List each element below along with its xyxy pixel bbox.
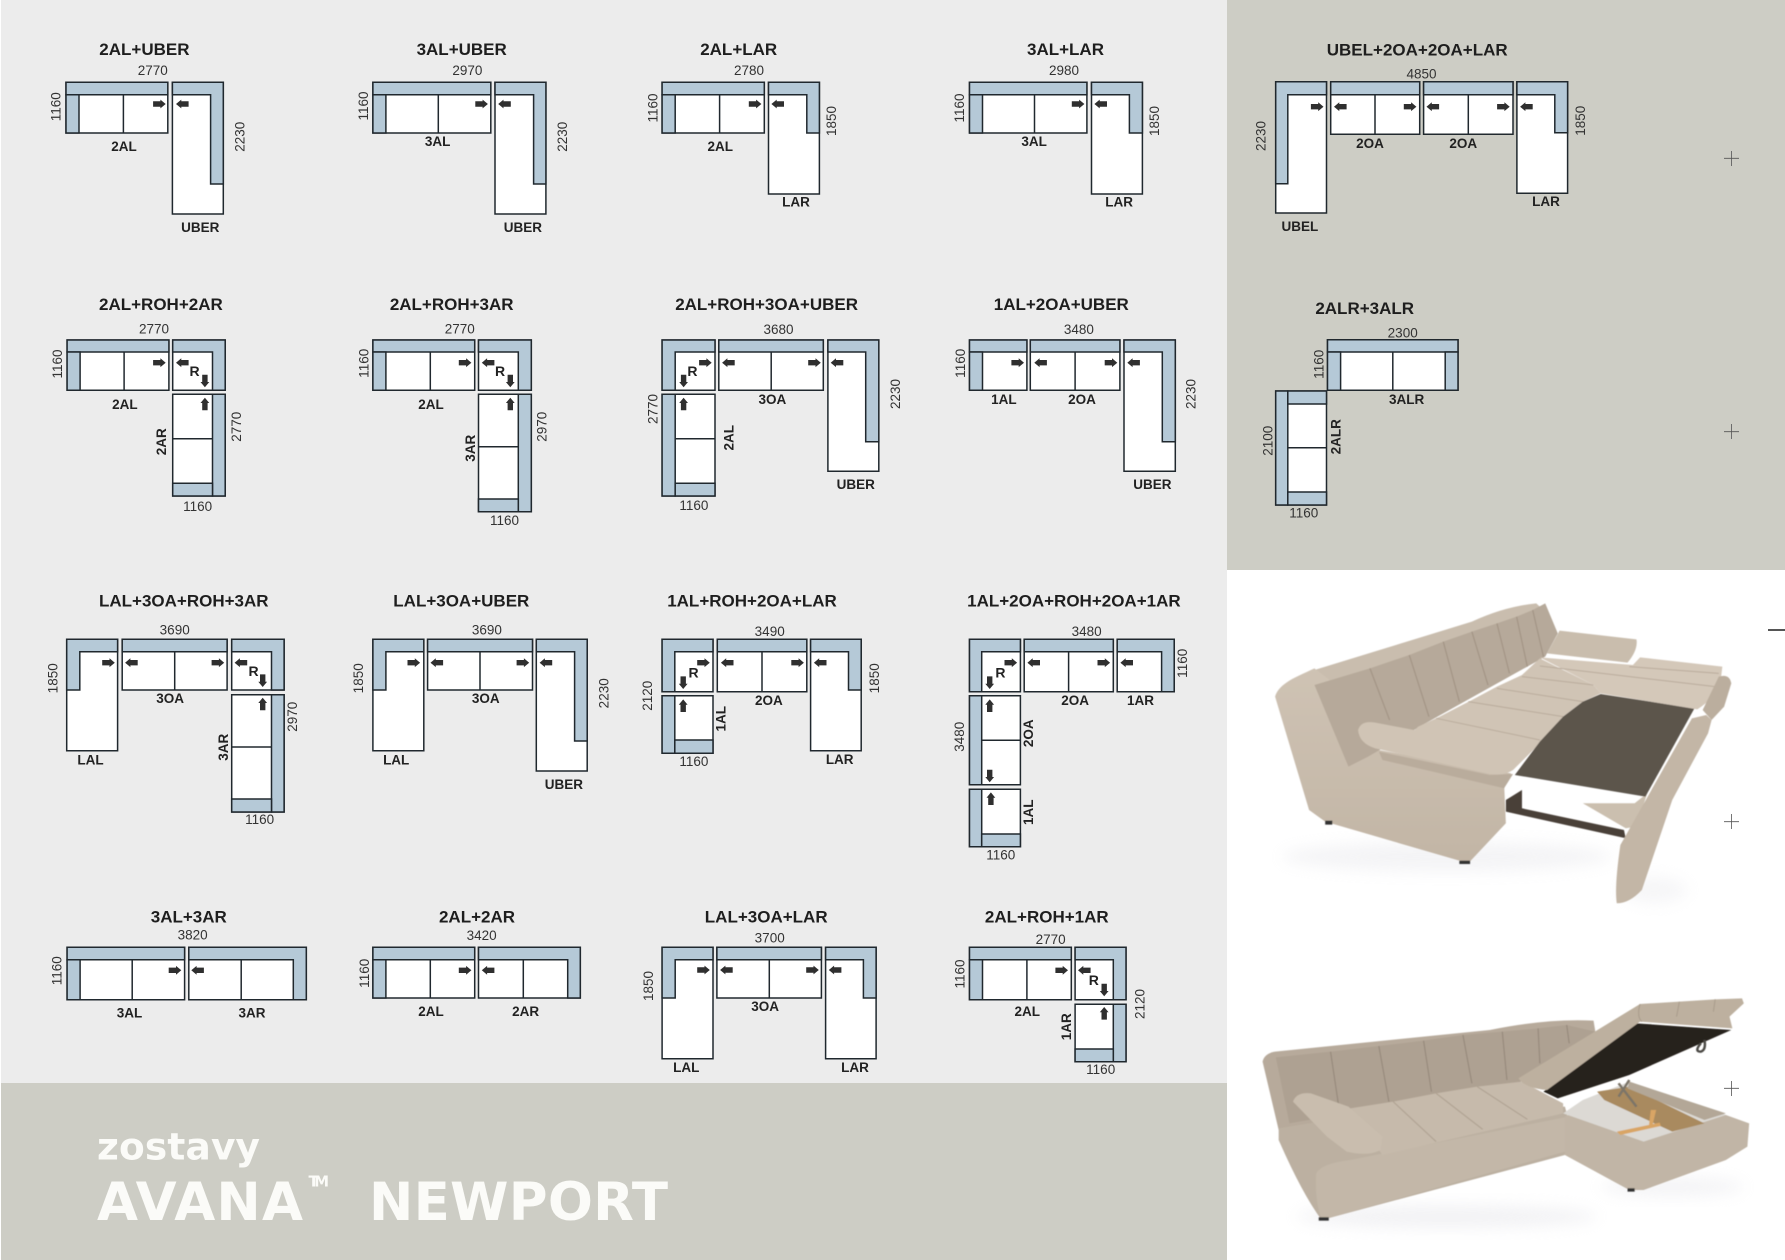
background: footer band — [1, 1083, 1227, 1260]
heading: 1AL+2OA+ROH+2OA+1AR — [967, 592, 1181, 611]
length dimension left: 3480 — [952, 722, 967, 752]
module 2AL vertical — [662, 394, 715, 496]
model name: NEWPORT — [369, 1172, 668, 1233]
label 3AL: 3AL — [1021, 134, 1047, 149]
width dimension: 3680 — [763, 322, 794, 337]
width dimension: 2770 — [139, 321, 169, 336]
depth dimension bottom: 1160 — [245, 812, 274, 827]
module LAR — [1092, 82, 1142, 194]
registration mark: sofa one — [1724, 814, 1739, 829]
length dimension left: 2120 — [640, 681, 655, 711]
length dimension: 1850 — [641, 971, 656, 1001]
module ROH corner: R — [688, 664, 699, 680]
label LAR: LAR — [841, 1060, 869, 1075]
width dimension: 3700 — [755, 930, 785, 945]
label 3AL: 3AL — [117, 1005, 142, 1020]
module 2AR — [478, 947, 580, 998]
heading: 1AL+2OA+UBER — [994, 295, 1129, 314]
edge dash mark — [1768, 629, 1785, 631]
module 2OA — [717, 639, 807, 692]
label 3OA: 3OA — [472, 691, 500, 706]
photo: sofa with open storage — [1263, 998, 1749, 1228]
label 2AL: 2AL — [708, 139, 733, 154]
label LAR: LAR — [826, 752, 854, 767]
label 2AL: 2AL — [111, 139, 137, 154]
label 2AL: 2AL — [418, 397, 444, 412]
module ROH corner: R — [248, 663, 259, 679]
label 2OA: 2OA — [1061, 693, 1089, 708]
module 3OA — [428, 639, 532, 690]
label 3AR: 3AR — [238, 1005, 266, 1020]
depth dimension bottom: 1160 — [183, 499, 212, 514]
depth dimension: 1160 — [646, 93, 661, 123]
diagram: 3AL+UBER — [356, 40, 570, 235]
heading: 2AL+2AR — [439, 908, 515, 927]
heading: LAL+3OA+LAR — [705, 908, 828, 927]
label 3AR: 3AR — [463, 435, 478, 462]
width dimension: 2770 — [1036, 932, 1066, 947]
heading: 2AL+ROH+3OA+UBER — [675, 295, 858, 314]
module 2AL — [67, 340, 169, 390]
heading: 2AL+ROH+2AR — [99, 295, 223, 314]
depth dimension: 1160 — [357, 959, 372, 988]
depth dimension: 1160 — [49, 92, 64, 121]
module UBER — [1124, 340, 1175, 471]
width dimension: 2770 — [445, 321, 475, 336]
depth dimension bottom: 1160 — [679, 498, 708, 513]
depth dimension bottom: 1160 — [1289, 506, 1318, 521]
module 3AL — [970, 82, 1087, 133]
module LAR — [1517, 82, 1568, 193]
diagram: 2ALR+3ALR — [1261, 299, 1458, 521]
width dimension: 3420 — [467, 928, 497, 943]
heading: 1AL+ROH+2OA+LAR — [667, 592, 837, 611]
module UBER — [172, 82, 223, 214]
label 2AR: 2AR — [512, 1004, 539, 1019]
length dimension right: 2970 — [285, 702, 300, 732]
label 1AL vertical: 1AL — [1021, 800, 1036, 825]
module LAR — [826, 947, 876, 1059]
module UBER — [828, 340, 879, 471]
heading: 2AL+LAR — [700, 40, 777, 59]
brand name: AVANA — [97, 1172, 303, 1233]
depth dimension bottom: 1160 — [490, 513, 519, 528]
module ROH corner — [232, 639, 284, 690]
width dimension: 2980 — [1049, 63, 1079, 78]
diagram: 2AL+ROH+2AR — [50, 295, 244, 514]
module 2OA — [1024, 639, 1113, 692]
depth dimension right: 1160 — [1175, 649, 1190, 678]
length dimension: 2230 — [232, 122, 247, 152]
module 1AL vertical — [970, 789, 1020, 847]
diagram: 1AL+2OA+ROH+2OA+1AR — [952, 592, 1190, 862]
label UBER: UBER — [504, 220, 542, 235]
label LAR: LAR — [1532, 194, 1560, 209]
diagram: UBEL+2OA+2OA+LAR — [1254, 41, 1588, 234]
module LAR — [768, 82, 819, 194]
length dimension: 2100 — [1261, 426, 1276, 456]
length dimension: 1850 — [1147, 106, 1162, 136]
label 3OA: 3OA — [156, 691, 184, 706]
diagram: 3AL+3AR — [49, 908, 306, 1020]
depth dimension: 1160 — [356, 91, 371, 121]
length dimension left: 2230 — [1254, 121, 1268, 151]
width dimension: 2780 — [734, 63, 764, 78]
module 3AR — [478, 394, 531, 512]
module LAL — [373, 639, 424, 751]
width dimension: 3480 — [1072, 624, 1102, 639]
module LAR — [811, 639, 861, 751]
module 2AL — [970, 947, 1071, 1000]
length dimension left: 2770 — [646, 394, 661, 424]
module ROH corner — [478, 340, 531, 390]
heading: LAL+3OA+ROH+3AR — [99, 592, 269, 611]
module ROH corner — [662, 340, 715, 390]
module 2AL — [662, 82, 764, 133]
module 3AR — [232, 695, 284, 812]
label 3OA: 3OA — [751, 999, 779, 1014]
module 2AL — [373, 947, 475, 998]
module 2OA first — [1331, 82, 1420, 134]
length dimension left: 1850 — [46, 663, 61, 693]
label 1AL: 1AL — [714, 706, 729, 731]
length dimension: 2120 — [1132, 989, 1147, 1019]
module ROH corner — [1075, 947, 1126, 1000]
label 2AR: 2AR — [154, 428, 169, 455]
label UBER: UBER — [181, 220, 220, 235]
diagram: 2AL+ROH+1AR — [952, 908, 1147, 1077]
module 3ALR — [1328, 340, 1458, 390]
module 3AR — [189, 947, 306, 1000]
width dimension: 4850 — [1406, 66, 1437, 81]
depth dimension: 1160 — [50, 349, 65, 379]
module 3OA — [717, 947, 821, 998]
label 2OA: 2OA — [1068, 392, 1096, 407]
label 1AR: 1AR — [1127, 693, 1154, 708]
label 3ALR: 3ALR — [1389, 392, 1424, 407]
module LAL — [67, 639, 118, 751]
module ROH corner — [173, 340, 225, 390]
width dimension: 2300 — [1388, 325, 1418, 340]
length dimension: 1850 — [824, 106, 839, 136]
subtitle: zostavy — [97, 1124, 260, 1168]
label LAL: LAL — [77, 752, 104, 767]
width dimension: 3690 — [160, 622, 190, 637]
diagram: LAL+3OA+LAR — [641, 908, 876, 1075]
module UBER — [495, 82, 546, 214]
module 2AL — [373, 340, 475, 390]
label UBEL: UBEL — [1282, 219, 1318, 234]
label UBER: UBER — [1133, 477, 1172, 492]
depth dimension bottom: 1160 — [1086, 1062, 1115, 1077]
label 2OA: 2OA — [1356, 136, 1384, 151]
heading: LAL+3OA+UBER — [393, 592, 529, 611]
depth dimension: 1160 — [356, 349, 371, 378]
length dimension right: 2230 — [597, 678, 612, 708]
label 2OA: 2OA — [755, 693, 783, 708]
heading: 2AL+UBER — [99, 40, 190, 59]
depth dimension: 1160 — [1312, 350, 1327, 379]
length dimension: 2770 — [229, 412, 244, 442]
trademark: TM — [308, 1173, 329, 1191]
length dimension right: 2230 — [888, 379, 903, 409]
module ROH corner: R — [190, 363, 200, 379]
length dimension: 2970 — [535, 412, 550, 442]
module 1AR vertical — [1075, 1004, 1126, 1062]
diagram: LAL+3OA+ROH+3AR — [46, 592, 300, 827]
module 3OA — [719, 340, 823, 390]
label LAR: LAR — [782, 195, 810, 210]
width dimension: 2770 — [138, 63, 168, 78]
diagram: 2AL+2AR — [357, 908, 580, 1019]
photo: sofa with open bed — [1275, 603, 1731, 903]
depth dimension: 1160 — [952, 959, 968, 989]
label LAL: LAL — [673, 1060, 699, 1075]
label 1AR: 1AR — [1059, 1013, 1074, 1040]
module 2ALR — [1276, 391, 1326, 505]
module 1AL vertical — [662, 696, 713, 753]
heading: 2AL+ROH+3AR — [390, 295, 514, 314]
depth dimension: 1160 — [953, 349, 968, 378]
label LAR: LAR — [1105, 195, 1133, 210]
module 2OA vertical — [970, 696, 1020, 785]
length dimension: 2230 — [555, 122, 570, 152]
label 1AL: 1AL — [991, 392, 1017, 407]
heading: UBEL+2OA+2OA+LAR — [1327, 41, 1508, 60]
module 2OA — [1030, 340, 1120, 390]
module 1AL — [970, 340, 1027, 390]
diagram: 2AL+UBER — [49, 40, 247, 235]
label 3AR: 3AR — [216, 734, 231, 761]
label UBER: UBER — [545, 777, 583, 792]
module 2AR — [173, 394, 225, 496]
module LAL — [662, 947, 713, 1059]
diagram: 2AL+ROH+3OA+UBER — [646, 295, 903, 513]
module 3AL — [67, 947, 185, 1000]
module 1AR — [1117, 639, 1174, 692]
diagram: 1AL+2OA+UBER — [953, 295, 1199, 492]
module ROH corner: R — [1089, 972, 1099, 988]
diagram: 2AL+ROH+3AR — [356, 295, 550, 528]
module ROH corner: R — [495, 363, 505, 379]
module ROH corner: R — [687, 363, 697, 379]
label LAL: LAL — [383, 752, 409, 767]
label 3AL: 3AL — [425, 134, 450, 149]
length dimension right: 1850 — [1573, 106, 1588, 136]
registration mark: top right — [1724, 151, 1739, 166]
width dimension: 3480 — [1064, 322, 1094, 337]
width dimension: 3690 — [472, 622, 502, 637]
diagram: 1AL+ROH+2OA+LAR — [640, 592, 882, 769]
depth dimension: 1160 — [952, 93, 967, 123]
width dimension: 2970 — [452, 63, 482, 78]
depth dimension: 1160 — [49, 956, 64, 985]
label 2OA vertical: 2OA — [1021, 719, 1036, 747]
module ROH corner: R — [995, 664, 1005, 680]
heading: 2ALR+3ALR — [1315, 299, 1414, 318]
label 3OA: 3OA — [759, 392, 787, 407]
diagram: 2AL+LAR — [646, 40, 839, 210]
width dimension: 3490 — [755, 624, 785, 639]
diagram: LAL+3OA+UBER — [351, 592, 612, 792]
heading: 3AL+LAR — [1027, 40, 1104, 59]
registration mark: sofa two — [1724, 1081, 1739, 1096]
length dimension: 2230 — [1184, 379, 1199, 409]
length dimension right: 1850 — [867, 663, 882, 693]
module ROH corner — [970, 639, 1020, 692]
label 2AL: 2AL — [721, 425, 736, 450]
label 2AL: 2AL — [418, 1004, 444, 1019]
label 2ALR: 2ALR — [1329, 419, 1344, 454]
background: right upper panel — [1227, 0, 1785, 570]
background: main light panel — [1, 0, 1227, 1083]
module 3OA — [122, 639, 227, 690]
registration mark: upper right — [1724, 424, 1739, 439]
diagram: 3AL+LAR — [952, 40, 1162, 210]
label UBER: UBER — [837, 477, 875, 492]
label 2AL: 2AL — [1014, 1004, 1040, 1019]
module UBER — [536, 639, 587, 771]
heading: 3AL+UBER — [417, 40, 507, 59]
module 2AL — [66, 82, 168, 133]
width dimension: 3820 — [178, 927, 208, 942]
depth dimension bottom: 1160 — [986, 847, 1015, 862]
heading: 3AL+3AR — [151, 908, 227, 927]
label 2OA: 2OA — [1449, 136, 1477, 151]
footer title — [97, 1124, 668, 1233]
module 2OA second — [1424, 82, 1513, 134]
module UBEL — [1276, 82, 1326, 213]
depth dimension bottom: 1160 — [679, 754, 708, 769]
length dimension left: 1850 — [351, 663, 366, 693]
label 2AL: 2AL — [112, 397, 138, 412]
heading: 2AL+ROH+1AR — [985, 908, 1109, 927]
module 3AL — [373, 82, 491, 133]
module ROH corner — [662, 639, 713, 692]
